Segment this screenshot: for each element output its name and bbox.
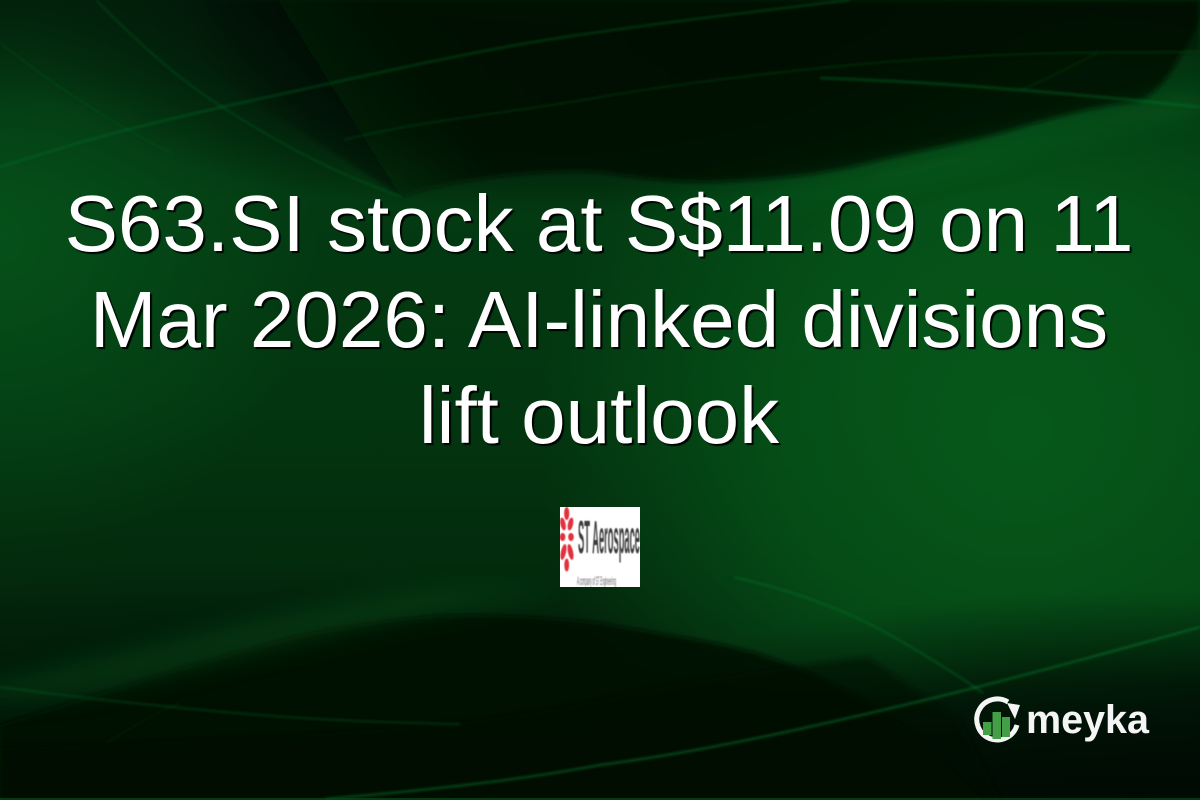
logo: ST Aerospace: [560, 507, 640, 587]
wordmark: meyka: [1026, 698, 1150, 742]
bottom mound: [0, 615, 985, 800]
title: lift outlook: [419, 371, 779, 460]
glow band above the bottom mound: [0, 588, 560, 702]
title: S63.SI stock at S$11.09 on 11: [65, 179, 1133, 268]
icon: growth ring with bars: [977, 699, 1020, 740]
title: Mar 2026: AI-linked divisions: [90, 275, 1108, 364]
icon: red star emblem: [559, 507, 575, 572]
top dark lens: [96, 0, 1200, 197]
glow band under the top lens: [640, 90, 1200, 201]
brand: meyka: [974, 696, 1150, 742]
title: [65, 179, 1133, 460]
